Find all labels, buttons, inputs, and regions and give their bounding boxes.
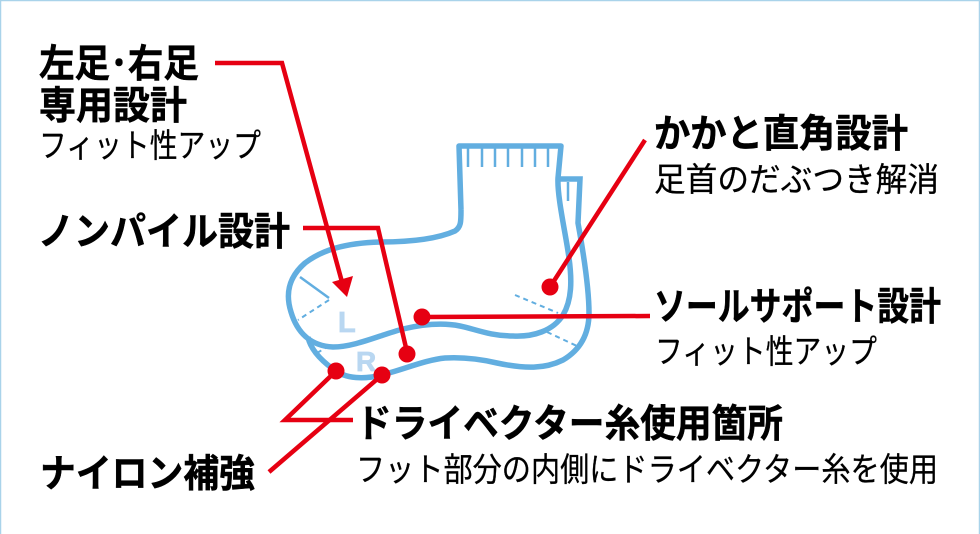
leader: right-angle heel design xyxy=(542,140,645,296)
text block: right-angle heel design: かかと直角設計 xyxy=(654,113,908,156)
label: R: R xyxy=(356,346,376,377)
illustration: socks xyxy=(288,146,589,378)
leader: left/right foot design with arrow xyxy=(215,63,353,297)
heading: nylon reinforcement: ナイロン補強 xyxy=(40,453,255,496)
text block: left/right foot design: フィット性アップ xyxy=(39,127,261,164)
text block: sole support design: フィット性アップ xyxy=(655,333,877,370)
leader: sole support design xyxy=(414,308,650,326)
front sock: left foot xyxy=(288,146,571,347)
text block: dry vector yarn area: ドライベクター糸使用箇所 xyxy=(356,403,783,446)
text block: right-angle heel design xyxy=(654,113,939,198)
label: L: L xyxy=(338,307,356,339)
leader: non-pile design xyxy=(303,228,416,362)
heading: non-pile design: ノンパイル設計 xyxy=(38,211,290,254)
text block: left/right foot design: 左足･右足 xyxy=(39,43,199,86)
text block: dry vector yarn area xyxy=(356,403,938,488)
text block: left/right foot design: 専用設計 xyxy=(39,85,187,128)
text block: left/right foot design xyxy=(39,43,261,164)
leader: dry vector yarn xyxy=(285,362,353,420)
text block: right-angle heel design: 足首のだぶつき解消 xyxy=(654,161,939,198)
leader: nylon reinforcement xyxy=(269,366,390,472)
back sock: right foot xyxy=(308,179,589,378)
text block: sole support design xyxy=(654,286,941,370)
